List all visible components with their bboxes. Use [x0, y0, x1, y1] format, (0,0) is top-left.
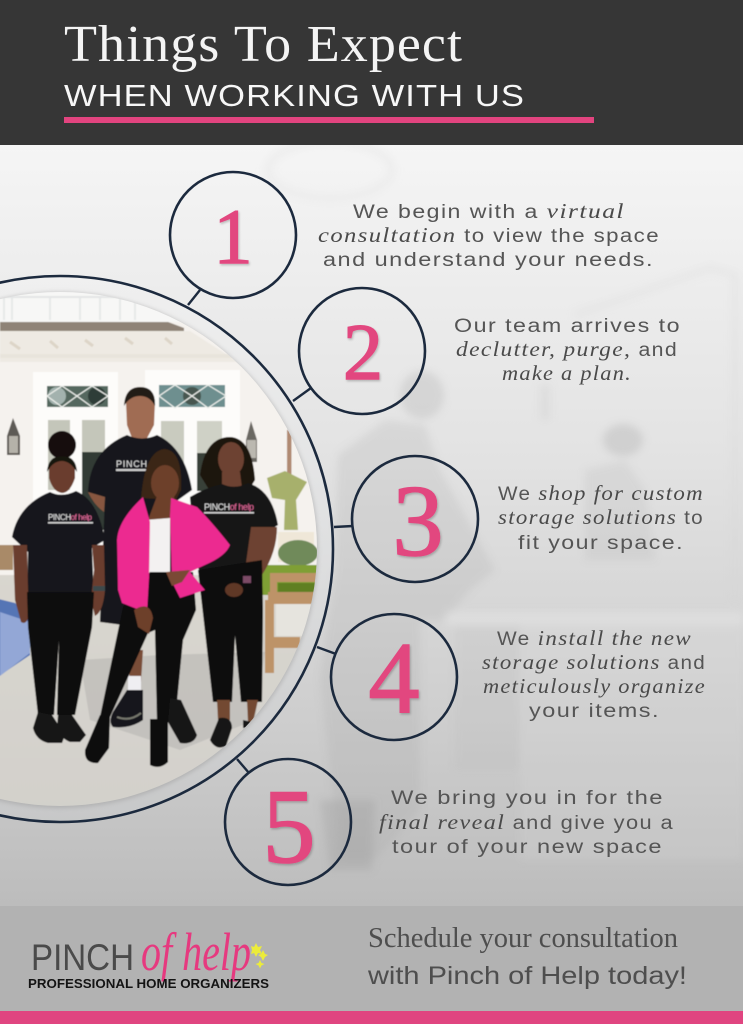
number circle 5 [225, 759, 351, 885]
step 5 text: We bring you in for the [391, 788, 664, 809]
icon: sparkles [251, 943, 268, 968]
person: woman in black, left: PINCHof help [48, 513, 93, 522]
faded background photo [268, 142, 743, 870]
number circle 2 [299, 288, 425, 414]
number circle 5: 5 [262, 768, 316, 885]
step 2 text: make a plan. [502, 361, 632, 385]
number circle 3: 3 [392, 465, 444, 578]
step 5 text [379, 788, 674, 858]
step 3 text: storage solutions to [498, 505, 704, 529]
logo: of help [141, 922, 251, 982]
team photo [0, 290, 330, 835]
step 4 text: We install the new [497, 626, 692, 650]
step 1 text [318, 199, 660, 271]
subtitle: WHEN WORKING WITH US [64, 78, 525, 113]
logo: PROFESSIONAL HOME ORGANIZERS [28, 976, 269, 991]
person: man at back: PINCH [116, 459, 147, 469]
step 2 [299, 288, 681, 414]
step 5 text: final reveal and give you a [379, 810, 674, 834]
number circle 1: 1 [214, 193, 252, 280]
wall lamps [7, 418, 257, 462]
step 3 text [498, 481, 704, 554]
person: woman in black, right [190, 437, 278, 748]
windows [33, 370, 240, 587]
big circle outline [0, 276, 333, 822]
footer panel [0, 906, 743, 1011]
header bar [0, 0, 743, 145]
step 2 text: declutter, purge, and [456, 337, 678, 361]
number circle 2: 2 [343, 309, 383, 397]
logo: PINCH [31, 937, 134, 978]
background panel [0, 145, 743, 907]
step 4 text: storage solutions and [482, 650, 706, 674]
step 1 text: We begin with a virtual [353, 199, 625, 223]
step 3 [352, 456, 704, 582]
step 4 [331, 614, 706, 740]
person: man at back [88, 387, 192, 727]
pool [0, 597, 30, 682]
big circle band [0, 277, 332, 821]
wooden bench [265, 573, 320, 673]
step 5 [225, 759, 674, 885]
logo [28, 922, 269, 991]
plants and hedge [260, 471, 320, 595]
step 4 text: your items. [529, 701, 660, 722]
step 1 text: consultation to view the space [318, 223, 660, 247]
call to action [367, 923, 687, 990]
step 2 text: Our team arrives to [454, 316, 681, 337]
step 2 text [454, 316, 681, 385]
step 3 text: fit your space. [518, 533, 684, 554]
step 1 [170, 172, 660, 298]
step 3 text: We shop for custom [498, 481, 704, 505]
title: Things To Expect [64, 16, 463, 73]
number circle 1 [170, 172, 296, 298]
call to action: with Pinch of Help today! [367, 962, 687, 990]
step 4 text: meticulously organize [483, 674, 706, 698]
connector lines [188, 290, 353, 773]
number circle 3 [352, 456, 478, 582]
ground [0, 574, 302, 806]
number circle 4: 4 [368, 622, 420, 735]
step 4 text [482, 626, 706, 722]
pink underline [64, 117, 594, 123]
call to action: Schedule your consultation [368, 923, 678, 954]
step 5 text: tour of your new space [392, 837, 663, 858]
person: woman in black, left [12, 431, 105, 743]
building [0, 290, 330, 590]
bottom pink bar [0, 1011, 743, 1024]
number circle 4 [331, 614, 457, 740]
step 1 text: and understand your needs. [323, 250, 654, 271]
person: front woman in pink blazer [85, 449, 230, 767]
person: woman in black, right: PINCHof help [204, 502, 254, 512]
